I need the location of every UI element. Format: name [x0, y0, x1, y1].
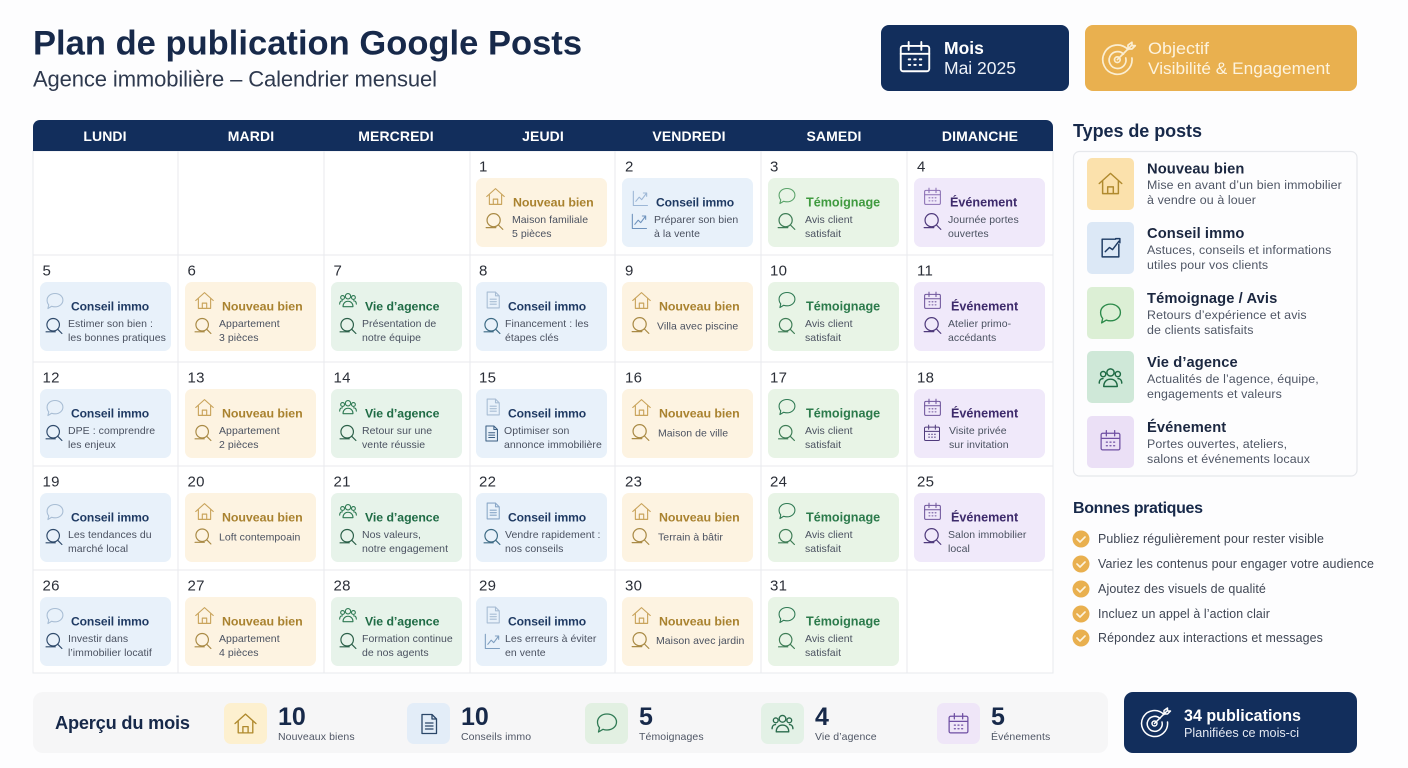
day 12: DPE : comprendre — [68, 425, 155, 437]
day 6: 6 — [188, 262, 196, 280]
day 5: Estimer son bien : — [68, 318, 153, 330]
day 8: Conseil immo — [508, 300, 586, 314]
day 29 — [476, 578, 607, 666]
day 17: Témoignage — [806, 406, 880, 420]
list: bonnes pratiques: Ajoutez des visuels de qualité — [1098, 581, 1266, 596]
day 3: Avis client — [805, 214, 853, 226]
day 12: Conseil immo — [71, 406, 149, 420]
day 28: Formation continue — [362, 633, 453, 645]
day 28: 28 — [334, 578, 351, 594]
day 22: Vendre rapidement : — [505, 529, 601, 541]
stat: nouveaux biens — [224, 703, 355, 744]
day 5: les bonnes pratiques — [68, 332, 166, 344]
day 13: 2 pièces — [219, 439, 259, 451]
day 11: Atelier primo- — [948, 318, 1012, 330]
day 24: Témoignage — [806, 510, 880, 524]
day 14 — [331, 370, 462, 458]
day 6: Appartement — [219, 318, 280, 330]
day 8: étapes clés — [505, 332, 559, 344]
day 2 — [622, 158, 753, 247]
day 4: Journée portes — [948, 214, 1019, 226]
calendar header: DIMANCHE — [942, 128, 1018, 144]
list: bonnes pratiques: Variez les contenus pour engager votre audience — [1098, 556, 1374, 571]
day 16 — [622, 370, 753, 458]
calendar header: MARDI — [228, 128, 274, 144]
legend: conseil immo: utiles pour vos clients — [1147, 258, 1268, 272]
legend: nouveau bien — [1087, 158, 1342, 210]
day 10: Témoignage — [806, 300, 880, 314]
stat: témoignages: Témoignages — [639, 731, 704, 743]
day 13: 13 — [188, 370, 205, 386]
day 31 — [768, 578, 899, 666]
list: bonnes pratiques: Publiez régulièrement pour rester visible — [1098, 531, 1324, 546]
icon: calendar — [901, 42, 929, 71]
day 22 — [476, 474, 607, 562]
icon: target — [1142, 708, 1170, 736]
day 21: Nos valeurs, — [362, 529, 421, 541]
day 15: Conseil immo — [508, 406, 586, 420]
stat: nouveaux biens: Nouveaux biens — [278, 731, 355, 743]
day 26: l’immobilier locatif — [68, 647, 152, 659]
total badge: Planifiées ce mois-ci — [1184, 726, 1299, 740]
day 24 — [768, 474, 899, 562]
heading: types de posts: Types de posts — [1073, 121, 1202, 141]
day 1: 5 pièces — [512, 228, 552, 240]
day 23 — [622, 474, 753, 562]
day 14: Vie d’agence — [365, 406, 440, 420]
calendar header: VENDREDI — [652, 128, 726, 144]
calendar grid — [33, 151, 1053, 673]
day 30: 30 — [625, 578, 642, 594]
day 28: Vie d’agence — [365, 614, 440, 628]
day 30 — [622, 578, 753, 666]
day 21: 21 — [334, 474, 351, 490]
day 14: 14 — [334, 370, 351, 386]
day 19: Les tendances du — [68, 529, 152, 541]
day 10 — [768, 262, 899, 351]
day 29: Conseil immo — [508, 614, 586, 628]
day 20: Nouveau bien — [222, 510, 303, 524]
total badge: 34 publications — [1184, 706, 1301, 725]
stat: vie d'agence — [761, 703, 877, 744]
day 11: Événement — [951, 298, 1019, 314]
day 31: Témoignage — [806, 614, 880, 628]
day 3: 3 — [770, 158, 779, 176]
stat: témoignages: 5 — [639, 703, 653, 731]
icon: target — [1103, 42, 1135, 74]
day 23: Nouveau bien — [659, 510, 740, 524]
day 30: Maison avec jardin — [656, 635, 745, 647]
day 14: Retour sur une — [362, 425, 432, 437]
panel: aperçu du mois — [33, 692, 1108, 753]
day 15: annonce immobilière — [504, 439, 602, 451]
legend: vie d'agence: Vie d’agence — [1147, 355, 1238, 371]
day 23: Terrain à bâtir — [658, 532, 723, 544]
day 2: à la vente — [654, 228, 700, 240]
legend: conseil immo: Astuces, conseils et informations — [1147, 243, 1331, 257]
day 20: 20 — [188, 474, 205, 490]
day 16: Nouveau bien — [659, 406, 740, 420]
day 4: ouvertes — [948, 228, 989, 240]
day 27: Nouveau bien — [222, 614, 303, 628]
day 16: Maison de ville — [658, 428, 728, 440]
stat: vie d'agence: 4 — [815, 703, 829, 731]
day 9: Nouveau bien — [659, 300, 740, 314]
day 5: Conseil immo — [71, 300, 149, 314]
stat: conseils immo: 10 — [461, 703, 489, 731]
legend: vie d'agence: Actualités de l’agence, équipe, — [1147, 372, 1319, 386]
title: Plan de publication Google Posts — [33, 24, 582, 62]
legend: témoignage: de clients satisfaits — [1147, 323, 1254, 337]
legend: événement: salons et événements locaux — [1147, 452, 1311, 466]
day 7: notre équipe — [362, 332, 421, 344]
day 10: satisfait — [805, 332, 841, 344]
list: bonnes pratiques — [1072, 530, 1374, 646]
heading: aperçu du mois: Aperçu du mois — [55, 713, 190, 733]
day 19: 19 — [42, 474, 60, 490]
day 23: 23 — [625, 474, 642, 490]
day 17: Avis client — [805, 425, 853, 437]
legend: événement — [1087, 416, 1311, 468]
stat: vie d'agence: Vie d’agence — [815, 731, 877, 743]
heading: bonnes pratiques: Bonnes pratiques — [1073, 500, 1203, 517]
day 22: nos conseils — [505, 543, 563, 555]
day 11: 11 — [917, 262, 933, 280]
day 6: Nouveau bien — [222, 300, 303, 314]
day 14: vente réussie — [362, 439, 425, 451]
day 25: 25 — [917, 474, 934, 490]
panel: types de posts — [1074, 152, 1357, 476]
day 25 — [914, 474, 1045, 562]
badge: objectif: Visibilité & Engagement — [1148, 59, 1330, 78]
day 7: Présentation de — [362, 318, 436, 330]
day 21: Vie d’agence — [365, 510, 440, 524]
day 18: Événement — [951, 406, 1019, 420]
day 5: 5 — [42, 262, 51, 280]
day 27: 4 pièces — [219, 647, 259, 659]
legend: nouveau bien: Mise en avant d’un bien immobilier — [1147, 178, 1342, 192]
day 2: Préparer son bien — [654, 214, 738, 226]
stat: témoignages — [585, 703, 704, 744]
day 1: Maison familiale — [512, 214, 588, 226]
day 31: satisfait — [805, 647, 841, 659]
day 2: Conseil immo — [656, 196, 734, 210]
badge: mois: Mai 2025 — [944, 58, 1016, 78]
calendar — [33, 120, 1053, 673]
day 6 — [185, 262, 316, 351]
day 28 — [331, 578, 462, 666]
stat: conseils immo — [407, 703, 531, 744]
day 9: Villa avec piscine — [657, 320, 738, 332]
day 4: Événement — [950, 194, 1018, 210]
day 9: 9 — [625, 262, 634, 280]
day 4: 4 — [917, 158, 926, 176]
legend: témoignage: Retours d’expérience et avis — [1147, 308, 1307, 322]
day 11 — [914, 262, 1045, 351]
day 5 — [40, 262, 171, 351]
calendar header — [33, 120, 1053, 151]
calendar header: SAMEDI — [806, 128, 862, 144]
day 26: Conseil immo — [71, 614, 149, 628]
stat: événements: 5 — [991, 703, 1005, 731]
day 26 — [40, 578, 171, 666]
day 25: local — [948, 543, 970, 555]
day 27: Appartement — [219, 633, 280, 645]
calendar header: LUNDI — [83, 128, 127, 144]
day 4 — [914, 158, 1045, 247]
day 8: 8 — [479, 262, 488, 280]
stat: nouveaux biens: 10 — [278, 703, 306, 731]
day 21 — [331, 474, 462, 562]
day 18: sur invitation — [949, 439, 1009, 451]
day 19 — [40, 474, 171, 562]
legend: nouveau bien: Nouveau bien — [1147, 162, 1245, 178]
day 25: Salon immobilier — [948, 529, 1027, 541]
day 29: en vente — [505, 647, 546, 659]
day 22: Conseil immo — [508, 510, 586, 524]
day 10: 10 — [770, 262, 787, 280]
day 18 — [914, 370, 1045, 458]
day 15: 15 — [479, 370, 496, 386]
day 13: Nouveau bien — [222, 406, 303, 420]
day 13: Appartement — [219, 425, 280, 437]
day 3 — [768, 158, 899, 247]
stat: événements — [937, 703, 1050, 744]
day 2: 2 — [625, 158, 634, 176]
legend: témoignage — [1087, 287, 1307, 339]
badge: objectif: Objectif — [1148, 39, 1209, 58]
day 12: 12 — [42, 370, 60, 386]
badge: objectif — [1085, 25, 1357, 91]
day 17: satisfait — [805, 439, 841, 451]
calendar header: JEUDI — [522, 128, 564, 144]
day 31: 31 — [770, 578, 787, 594]
day 22: 22 — [479, 474, 496, 490]
day 18: Visite privée — [949, 425, 1007, 437]
stat: conseils immo: Conseils immo — [461, 731, 531, 743]
legend: événement: Événement — [1147, 419, 1226, 436]
day 31: Avis client — [805, 633, 853, 645]
day 19: Conseil immo — [71, 510, 149, 524]
day 7: 7 — [334, 262, 342, 280]
day 24: Avis client — [805, 529, 853, 541]
subtitle: Agence immobilière – Calendrier mensuel — [33, 66, 437, 92]
day 26: 26 — [42, 578, 60, 594]
day 20 — [185, 474, 316, 562]
legend: nouveau bien: à vendre ou à louer — [1147, 193, 1256, 207]
calendar header: MERCREDI — [358, 128, 434, 144]
day 29: 29 — [479, 578, 496, 594]
badge: mois: Mois — [944, 38, 984, 58]
day 25: Événement — [951, 510, 1019, 524]
day 1: Nouveau bien — [513, 196, 594, 210]
day 11: accédants — [948, 332, 996, 344]
list: bonnes pratiques: Incluez un appel à l’action clair — [1098, 606, 1271, 621]
day 17 — [768, 370, 899, 458]
stat: événements: Événements — [991, 730, 1050, 743]
legend: vie d'agence: engagements et valeurs — [1147, 387, 1282, 401]
day 10: Avis client — [805, 318, 853, 330]
day 19: marché local — [68, 543, 128, 555]
day 18: 18 — [917, 370, 934, 386]
day 7: Vie d’agence — [365, 300, 440, 314]
day 8: Financement : les — [505, 318, 589, 330]
day 30: Nouveau bien — [659, 614, 740, 628]
day 13 — [185, 370, 316, 458]
day 21: notre engagement — [362, 543, 448, 555]
day 16: 16 — [625, 370, 642, 386]
day 1 — [476, 158, 607, 247]
day 20: Loft contempoain — [219, 532, 300, 544]
day 7 — [331, 262, 462, 351]
day 1: 1 — [479, 158, 488, 176]
day 3: Témoignage — [806, 196, 880, 210]
legend: événement: Portes ouvertes, ateliers, — [1147, 437, 1287, 451]
total badge — [1124, 692, 1357, 753]
legend: conseil immo — [1087, 222, 1331, 274]
day 12 — [40, 370, 171, 458]
day 24: satisfait — [805, 543, 841, 555]
day 27: 27 — [188, 578, 205, 594]
legend: témoignage: Témoignage / Avis — [1147, 291, 1277, 307]
day 28: de nos agents — [362, 647, 429, 659]
day 29: Les erreurs à éviter — [505, 633, 597, 645]
badge: mois — [881, 25, 1069, 91]
day 6: 3 pièces — [219, 332, 259, 344]
day 15 — [476, 370, 607, 458]
day 15: Optimiser son — [504, 425, 570, 437]
day 27 — [185, 578, 316, 666]
day 8 — [476, 262, 607, 351]
day 26: Investir dans — [68, 633, 128, 645]
legend: vie d'agence — [1087, 351, 1319, 403]
day 24: 24 — [770, 474, 787, 490]
day 3: satisfait — [805, 228, 841, 240]
day 9 — [622, 262, 753, 351]
day 17: 17 — [770, 370, 787, 386]
day 12: les enjeux — [68, 439, 116, 451]
legend: conseil immo: Conseil immo — [1147, 226, 1245, 242]
list: bonnes pratiques: Répondez aux interactions et messages — [1098, 630, 1323, 645]
